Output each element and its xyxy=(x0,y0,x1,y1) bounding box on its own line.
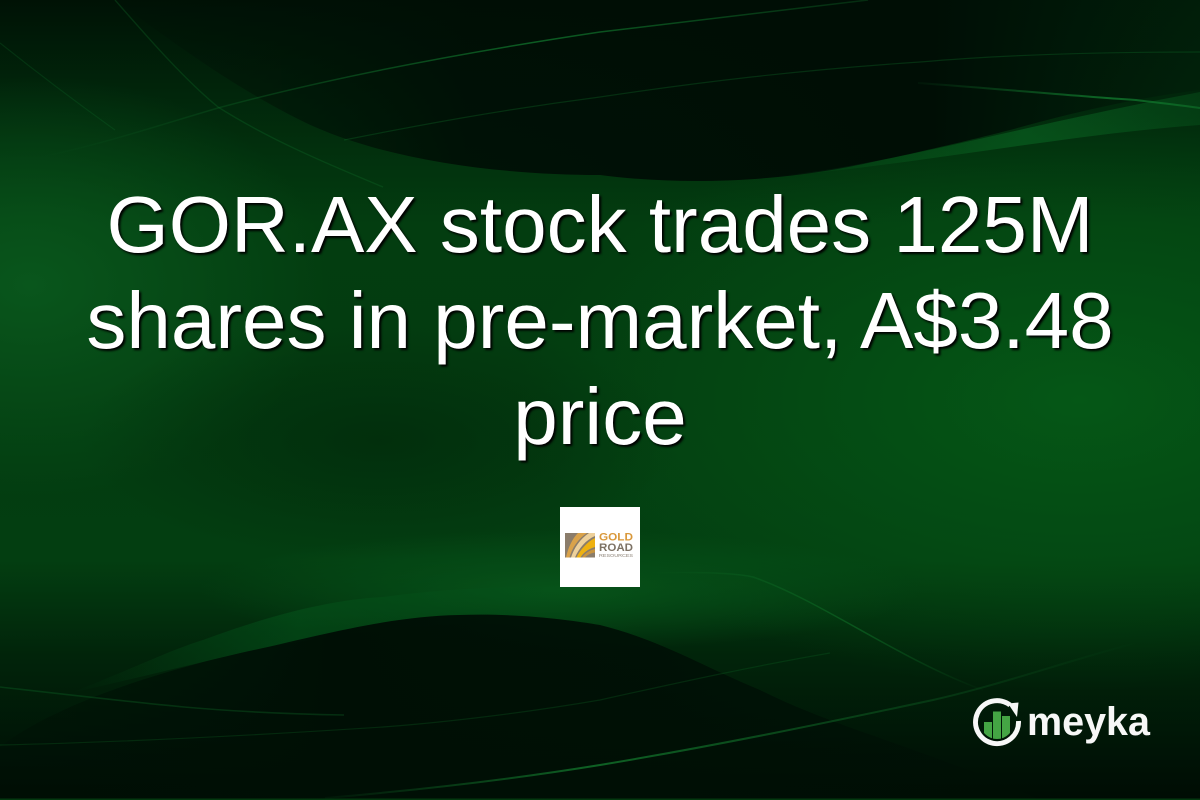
title: GOR.AX stock trades 125M shares in pre-market, A$3.48 price xyxy=(86,180,1114,461)
logo: meyka xyxy=(973,698,1151,746)
upper thin lines xyxy=(40,0,868,157)
wordmark: RESOURCES: RESOURCES xyxy=(599,553,633,558)
icon: fan mark xyxy=(565,533,595,558)
logo: Gold Road Resources xyxy=(560,507,640,587)
wordmark: meyka xyxy=(1027,700,1151,744)
wordmark: ROAD: ROAD xyxy=(599,542,633,554)
upper lens xyxy=(115,0,1200,181)
wordmark: GOLD: GOLD xyxy=(599,532,633,544)
lower waves xyxy=(70,587,640,693)
icon: circular arrow with bars xyxy=(976,701,1019,744)
green band beneath upper lens xyxy=(760,92,1200,178)
